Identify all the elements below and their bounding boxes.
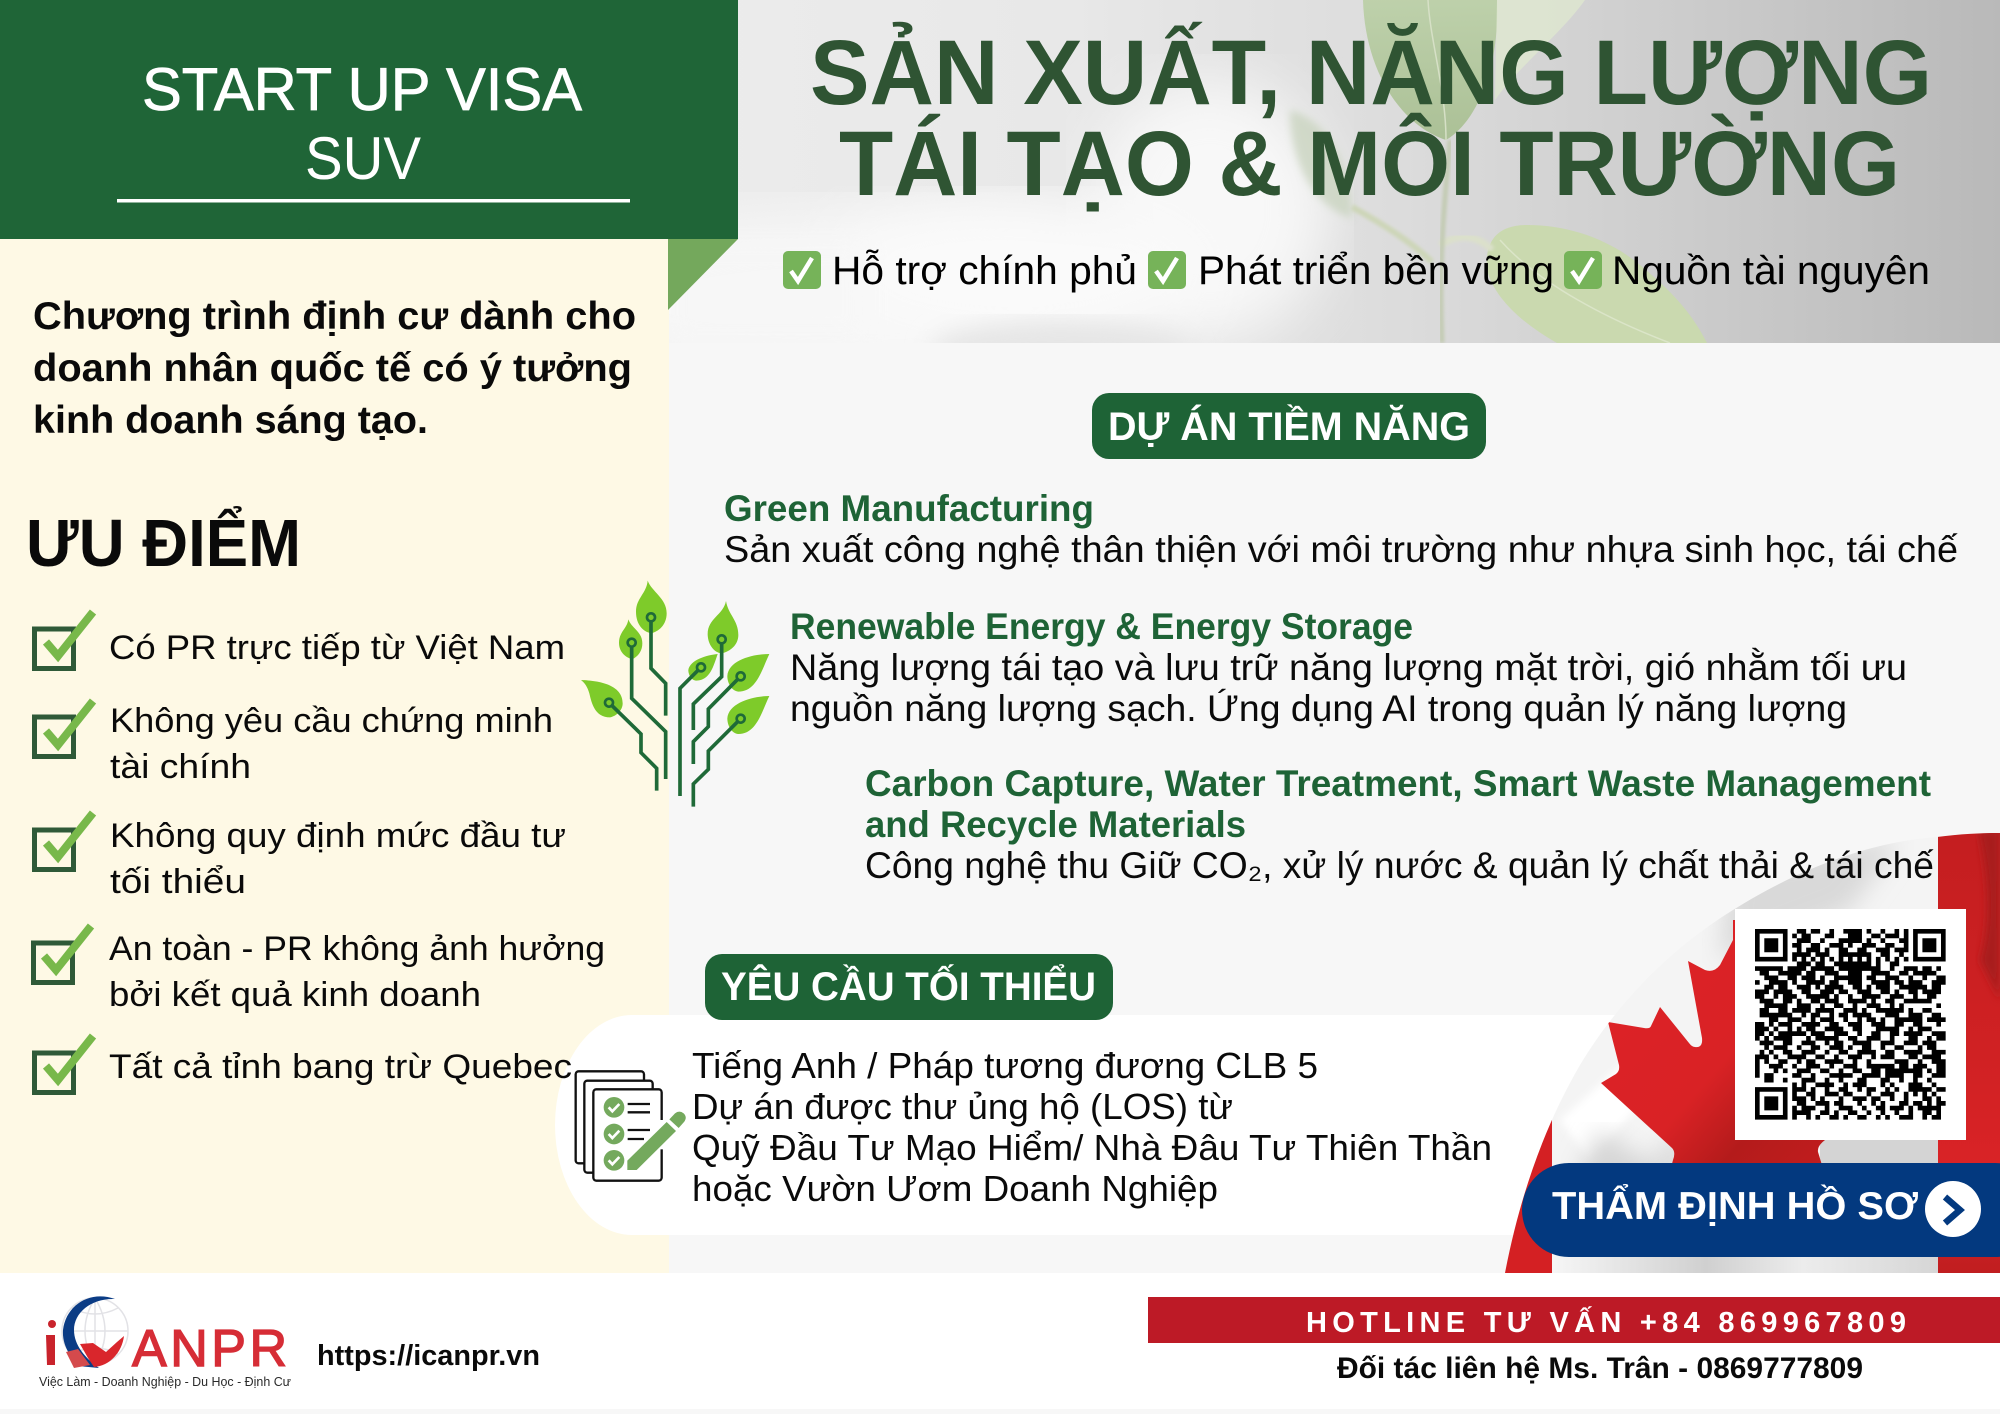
item 4: An toàn - PR không ảnh hưởng — [109, 930, 605, 968]
pill heading: minimum requirements — [705, 954, 1113, 1020]
project: renewable energy: Renewable Energy & Energy Storage — [790, 606, 1413, 647]
intro text: doanh nhân quốc tế có ý tưởng — [33, 347, 632, 390]
item 2: Không yêu cầu chứng minh — [110, 702, 553, 740]
text: Phat trien ben vung: Phát triển bền vững — [1198, 249, 1554, 293]
project: carbon capture — [865, 763, 1934, 886]
project: renewable energy: nguồn năng lượng sạch. Ứng dụng AI trong quản lý năng lượng — [790, 688, 1847, 729]
requirements text: Dự án được thư ủng hộ (LOS) từ — [692, 1086, 1233, 1127]
hotline bar — [1148, 1297, 2000, 1343]
requirements text: Quỹ Đầu Tư Mạo Hiểm/ Nhà Đâu Tư Thiên Thần — [692, 1127, 1492, 1168]
photo banner: plant background — [738, 0, 2000, 343]
advantages list — [34, 612, 605, 1092]
title: TÁI TẠO & MÔI TRƯỜNG — [839, 112, 1900, 215]
flag of Canada backdrop — [1500, 830, 2000, 1280]
logo letter i — [46, 1320, 56, 1365]
project: carbon capture: and Recycle Materials — [865, 804, 1246, 845]
item 1 — [34, 612, 565, 668]
text: Nguon tai nguyen: Nguồn tài nguyên — [1612, 249, 1930, 293]
header panel: Start Up Visa — [0, 0, 738, 239]
project: green manufacturing: Green Manufacturing — [724, 488, 1094, 529]
item 4 — [34, 926, 605, 1014]
pill heading: potential projects — [1092, 393, 1486, 459]
intro text — [33, 295, 636, 442]
item 5: Tất cả tỉnh bang trừ Quebec — [109, 1048, 572, 1086]
highlights row — [783, 248, 1930, 293]
title: SẢN XUẤT, NĂNG LƯỢNG — [810, 21, 1932, 124]
item 5 — [34, 1036, 572, 1092]
website url: https://icanpr.vn — [317, 1340, 540, 1372]
project: green manufacturing: Sản xuất công nghệ thân thiện với môi trường như nhựa sinh học, tái chế — [724, 529, 1958, 570]
item 1: Có PR trực tiếp từ Việt Nam — [109, 629, 565, 667]
project: green manufacturing — [724, 488, 1958, 570]
requirements text: Tiếng Anh / Pháp tương đương CLB 5 — [692, 1045, 1318, 1086]
project: renewable energy: Năng lượng tái tạo và lưu trữ năng lượng mặt trời, gió nhằm tối ưu — [790, 647, 1907, 688]
panel: cream left column — [0, 239, 669, 1273]
panel: white requirements card — [555, 1015, 2000, 1235]
requirements text: hoặc Vườn Ươm Doanh Nghiệp — [692, 1168, 1218, 1209]
icon: check 3 — [1564, 251, 1602, 289]
heading: SUV: SUV — [305, 125, 421, 192]
hotline bar: HOTLINE TƯ VẤN +84 869967809 — [1306, 1305, 1906, 1339]
contact partner: Đối tác liên hệ Ms. Trân - 0869777809 — [1337, 1352, 1863, 1385]
logo wordmark: ANPR — [132, 1320, 287, 1378]
title — [810, 21, 1932, 215]
pill heading: potential projects: DỰ ÁN TIỀM NĂNG — [1108, 403, 1470, 449]
item 4: bởi kết quả kinh doanh — [109, 976, 481, 1014]
logo: iCanPR — [39, 1296, 291, 1389]
maple leaf — [1601, 920, 1825, 1175]
requirements text — [692, 1045, 1492, 1209]
icon: arrow circle — [1925, 1181, 1981, 1237]
icon: check 2 — [1148, 251, 1186, 289]
button: assess file: THẨM ĐỊNH HỒ SƠ — [1552, 1183, 1919, 1228]
QR code — [1735, 909, 1966, 1140]
logo tagline: Việc Làm - Doanh Nghiệp - Du Học - Định Cư — [39, 1375, 291, 1389]
decorative green triangle fold — [668, 239, 738, 310]
intro text: Chương trình định cư dành cho — [33, 295, 636, 338]
project: renewable energy — [790, 606, 1907, 729]
footer band — [0, 1273, 2000, 1409]
item 2: tài chính — [110, 748, 251, 786]
item 2 — [34, 701, 553, 786]
heading: advantages: ƯU ĐIỂM — [26, 506, 301, 581]
item 3 — [34, 813, 566, 901]
icon: circuit plant — [581, 581, 769, 807]
heading: START UP VISA: START UP VISA — [142, 56, 582, 123]
intro text: kinh doanh sáng tạo. — [33, 399, 428, 442]
pill heading: minimum requirements: YÊU CẦU TỐI THIỂU — [721, 962, 1096, 1009]
item 3: tối thiểu — [110, 863, 246, 901]
icon: checklist documents — [576, 1071, 686, 1181]
text: Ho tro chinh phu: Hỗ trợ chính phủ — [832, 248, 1137, 293]
icon: check 1 — [783, 251, 821, 289]
button: assess file — [1522, 1163, 2000, 1257]
item 3: Không quy định mức đầu tư — [110, 817, 566, 855]
project: carbon capture: Carbon Capture, Water Treatment, Smart Waste Management — [865, 763, 1931, 804]
project: carbon capture: Công nghệ thu Giữ CO₂, xử lý nước & quản lý chất thải & tái chế — [865, 845, 1934, 886]
